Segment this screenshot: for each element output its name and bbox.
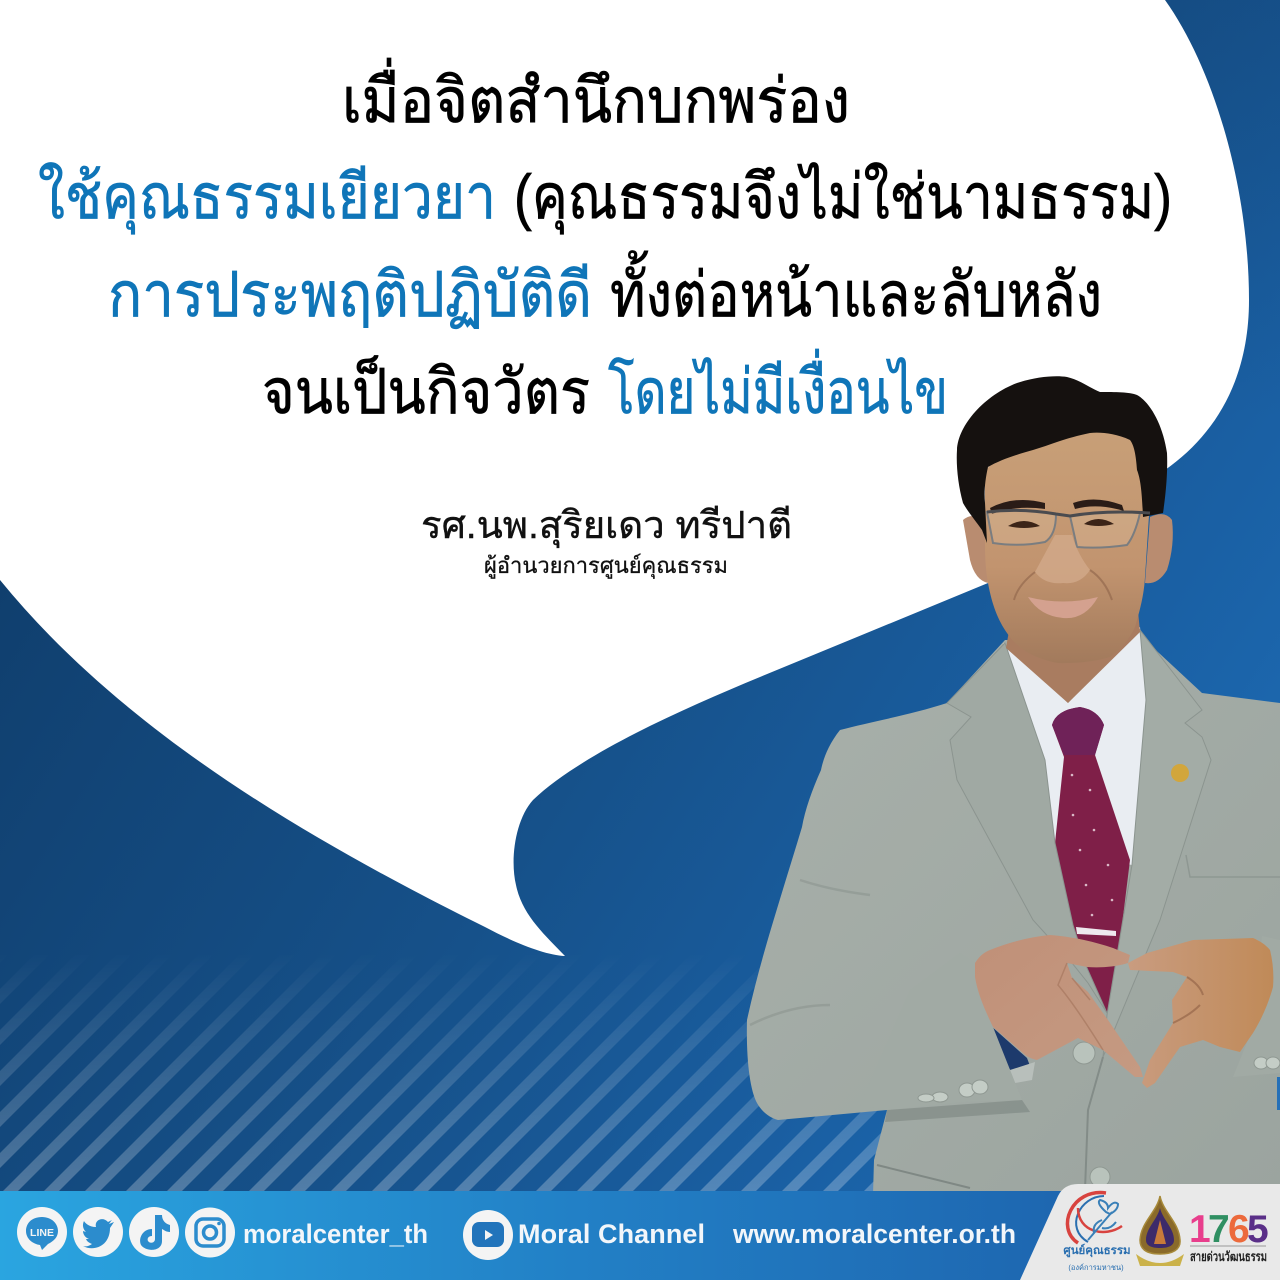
dark inner cuff [990, 1025, 1030, 1070]
icon: LINE: LINE [30, 1227, 54, 1239]
sleeve fold shadow [750, 880, 870, 1025]
shadow under left cuff [885, 1100, 1030, 1122]
logo: 1765: 7 [1208, 1208, 1230, 1251]
right lapel [1103, 630, 1211, 1057]
logo: 1765: 6 [1228, 1208, 1250, 1251]
icon: TikTok [129, 1207, 179, 1257]
glasses [987, 510, 1140, 548]
hip pocket [877, 1165, 970, 1188]
right hand finger creases [1173, 977, 1203, 1023]
glasses top bar [987, 510, 1150, 516]
eyes [1008, 519, 1114, 528]
white speech bubble [0, 0, 1249, 956]
logo: culture seal [1136, 1196, 1184, 1266]
strip of background at right edge [1277, 1077, 1280, 1110]
right sleeve cuff [1233, 936, 1280, 1077]
nose [1035, 535, 1090, 583]
left sleeve cuff [860, 953, 1022, 1110]
icon: YouTube [463, 1210, 513, 1260]
footer logo panel [1020, 1184, 1280, 1280]
icon: LINE [17, 1207, 67, 1257]
channel: Moral Channel: Moral Channel [518, 1219, 705, 1249]
logo: 1765: 5 [1247, 1208, 1269, 1251]
logo: moral center: (องค์การมหาชน) [1068, 1263, 1124, 1272]
breast pocket [1186, 855, 1280, 877]
shirt and collar [1003, 627, 1146, 865]
headline line 2 blue: ใช้คุณธรรมเยียวยา [38, 162, 496, 234]
speaker name: รศ.นพ.สุริยเดว ทรีปาตี [421, 505, 792, 548]
jacket seam [1085, 1057, 1103, 1190]
tie clip [1076, 927, 1116, 936]
diagonal stripe pattern [0, 982, 881, 1191]
logo: 1765: 1 [1189, 1208, 1211, 1251]
suit jacket [747, 640, 1280, 1195]
smile [1028, 597, 1098, 618]
logo: moral center [1063, 1193, 1131, 1272]
lapel pin [1171, 764, 1189, 782]
headline line 3 black: ทั้งต่อหน้าและลับหลัง [610, 250, 1102, 330]
inner shirt cuff [1010, 1062, 1035, 1083]
handle: moralcenter_th: moralcenter_th [243, 1219, 428, 1249]
footer bar [0, 1184, 1280, 1280]
logo: 1765 [1189, 1208, 1269, 1264]
smile folds [1014, 570, 1112, 600]
icon: Instagram [185, 1208, 235, 1258]
left hand [975, 935, 1143, 1077]
cuff buttons left [918, 1080, 988, 1102]
headline line 4 blue: โดยไม่มีเงื่อนไข [608, 349, 948, 427]
background: upper right shade [1100, 0, 1280, 420]
headline [38, 58, 1172, 427]
right hand [1128, 938, 1273, 1088]
logo: moral center: ศูนย์คุณธรรม [1063, 1243, 1131, 1258]
headline line 1: เมื่อจิตสำนึกบกพร่อง [342, 58, 850, 136]
right cuff buttons [1254, 1057, 1280, 1069]
left lapel [947, 643, 1107, 1013]
ears [963, 514, 1173, 583]
left hand finger creases [1058, 963, 1103, 1050]
headline line 3 blue: การประพฤติปฏิบัติดี [108, 261, 592, 330]
neck [1006, 600, 1140, 703]
face [985, 420, 1150, 663]
necktie [1052, 707, 1130, 1013]
speaker title: ผู้อำนวยการศูนย์คุณธรรม [484, 553, 728, 579]
jacket buttons [1073, 1042, 1110, 1187]
person photo illustration [747, 376, 1280, 1195]
headline line 2 black: (คุณธรรมจึงไม่ใช่นามธรรม) [514, 162, 1172, 234]
headline line 4 black: จนเป็นกิจวัตร [262, 355, 590, 427]
hair [957, 376, 1167, 543]
website address: www.moralcenter.or.th [732, 1219, 1016, 1249]
icon: Twitter [73, 1207, 123, 1257]
eyebrows [990, 499, 1124, 514]
